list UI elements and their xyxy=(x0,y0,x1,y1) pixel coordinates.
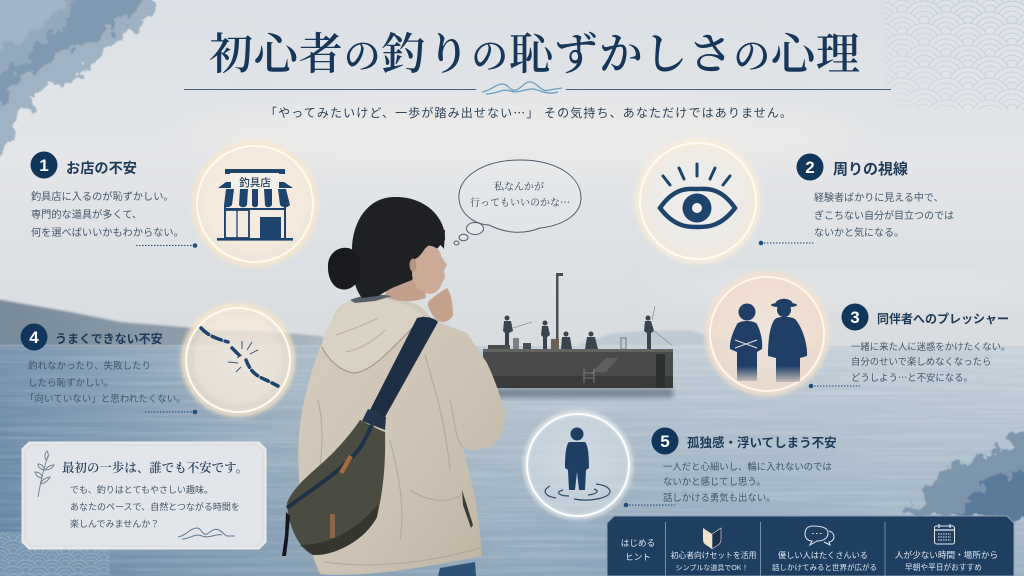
badge 4: 4 xyxy=(29,328,39,347)
icon: chat bubbles xyxy=(805,526,834,545)
heading 1: お店の不安 xyxy=(66,160,137,177)
hair xyxy=(352,197,445,298)
hint 1 xyxy=(671,528,756,572)
panel: pier with anglers xyxy=(483,273,673,398)
note text: でも、釣りはとてもやさしい趣味。 xyxy=(70,484,213,495)
badge 2: 2 xyxy=(805,158,815,177)
bag xyxy=(287,420,385,555)
leader 4 xyxy=(145,410,197,414)
hint 3 xyxy=(895,524,998,572)
icon circle: broken line xyxy=(184,306,292,414)
leader 5 xyxy=(624,503,675,507)
text 1 xyxy=(31,190,184,239)
hint 2 xyxy=(772,526,877,572)
hint 3: 早朝や平日がおすすめ xyxy=(905,562,982,572)
shoulder strap xyxy=(370,317,438,417)
note text: あなたのペースで、自然とつながる時間を xyxy=(70,501,240,512)
heading 5: 孤独感・浮いてしまう不安 xyxy=(687,435,837,450)
hint 1: 初心者向けセットを活用 xyxy=(671,550,756,560)
decoration: seigaiha pattern top right xyxy=(885,0,1024,110)
panel: item 2 gaze xyxy=(638,141,954,261)
icon: small wave xyxy=(178,528,235,539)
text 1: 釣具店に入るのが恥ずかしい。 xyxy=(31,190,174,203)
hint 2: 優しい人はたくさんいる xyxy=(778,550,868,560)
badge 3: 3 xyxy=(850,308,860,327)
icon: thought bubble xyxy=(454,160,581,245)
heading 4: うまくできない不安 xyxy=(55,331,163,346)
icon circle: two people xyxy=(708,275,826,393)
figure: woman from behind xyxy=(282,197,505,576)
neck xyxy=(384,280,426,301)
hint label: ヒント xyxy=(625,552,651,562)
text 1: 何を選べばいいかもわからない。 xyxy=(31,226,184,239)
title divider with wave ornament xyxy=(184,82,891,94)
ear xyxy=(410,258,416,272)
fringe xyxy=(405,230,445,260)
hand xyxy=(428,288,453,322)
panel: item 1 shop anxiety xyxy=(30,144,315,264)
text 3 xyxy=(851,341,1010,384)
text 4 xyxy=(25,360,186,405)
decoration: seigaiha pattern bottom left xyxy=(0,532,110,576)
text 2 xyxy=(814,191,954,239)
leader 1 xyxy=(136,243,197,248)
note heading: 最初の一歩は、誰でも不安です。 xyxy=(62,460,248,475)
text 3: 一緒に来た人に迷惑をかけたくない。 xyxy=(851,341,1010,352)
text 5: ないかと感じてし思う。 xyxy=(663,476,766,487)
hint 3: 人が少ない時間・場所から xyxy=(895,549,998,560)
text 4: 釣れなかったり、失敗したり xyxy=(28,360,151,372)
jacket pocket xyxy=(462,490,473,528)
text 4: したら恥ずかしい。 xyxy=(28,377,114,389)
decoration: watercolor bottom right xyxy=(905,415,1024,520)
icon: calendar xyxy=(934,524,954,544)
panel: item 3 companion pressure xyxy=(708,275,1010,393)
callout: encouragement note xyxy=(22,442,266,549)
heading 2: 周りの視線 xyxy=(833,160,908,178)
badge 5 xyxy=(652,428,678,454)
title: 初心者の釣りの恥ずかしさの心理 xyxy=(209,30,860,79)
heading 3: 同伴者へのプレッシャー xyxy=(877,311,1009,326)
icon circle: eye xyxy=(638,141,758,261)
jacket folds xyxy=(316,355,480,565)
jacket xyxy=(298,297,505,575)
badge 4 xyxy=(20,324,48,350)
collar xyxy=(350,295,392,303)
text 4: 「向いていない」と思われたくない。 xyxy=(25,393,186,405)
text 2: ぎこちない自分が目立つのでは xyxy=(814,209,954,222)
badge 2 xyxy=(796,154,824,180)
badge 5: 5 xyxy=(660,432,670,451)
badge 3 xyxy=(842,304,868,330)
text 3: 自分のせいで楽しめなくなったら xyxy=(851,356,991,367)
hint label xyxy=(621,538,655,562)
decoration: watercolor top left xyxy=(0,0,158,165)
icon circle: shop xyxy=(195,144,315,264)
strap buckle xyxy=(362,409,386,430)
icon circle: person on ripples xyxy=(526,413,630,517)
text 2: 経験者ばかりに見える中で、 xyxy=(814,191,944,204)
hint 1: シンプルな道具でOK！ xyxy=(676,563,748,572)
hint 2: 話しかけてみると世界が広がる xyxy=(772,562,877,572)
leader 2 xyxy=(759,241,815,245)
text 5: 一人だと心細いし、輪に入れないのでは xyxy=(663,461,832,472)
face xyxy=(412,246,447,294)
icon circle: shop: 釣具店 xyxy=(239,176,271,189)
badge 1 xyxy=(30,152,58,178)
text 5 xyxy=(663,461,832,503)
icon: thought bubble: 私なんかが xyxy=(494,181,544,193)
panel: item 4 failure anxiety xyxy=(20,306,292,414)
panel: item 5 isolation xyxy=(526,413,837,517)
text 5: 話しかける勇気も出ない。 xyxy=(663,492,776,503)
text 1: 専門的な道具が多くて、 xyxy=(31,208,142,221)
hint label: はじめる xyxy=(621,538,655,548)
note text xyxy=(70,484,240,529)
icon: beginner mark xyxy=(703,528,721,549)
subtitle: 「やってみたいけど、一歩が踏み出せない…」 その気持ち、あなただけではありません。 xyxy=(265,104,792,121)
text 3: どうしよう…と不安になる。 xyxy=(851,370,973,384)
icon: thought bubble: 行ってもいいのかな… xyxy=(470,194,570,209)
leader 3 xyxy=(809,384,860,388)
note text: 楽しんでみませんか？ xyxy=(70,518,159,529)
text 2: ないかと気になる。 xyxy=(814,226,904,239)
panel: starter hints xyxy=(607,516,1014,576)
hood xyxy=(322,299,424,373)
badge 1: 1 xyxy=(39,156,49,175)
hair bun xyxy=(328,248,360,290)
icon: leaf sprig xyxy=(35,451,54,497)
jeans xyxy=(438,562,476,576)
